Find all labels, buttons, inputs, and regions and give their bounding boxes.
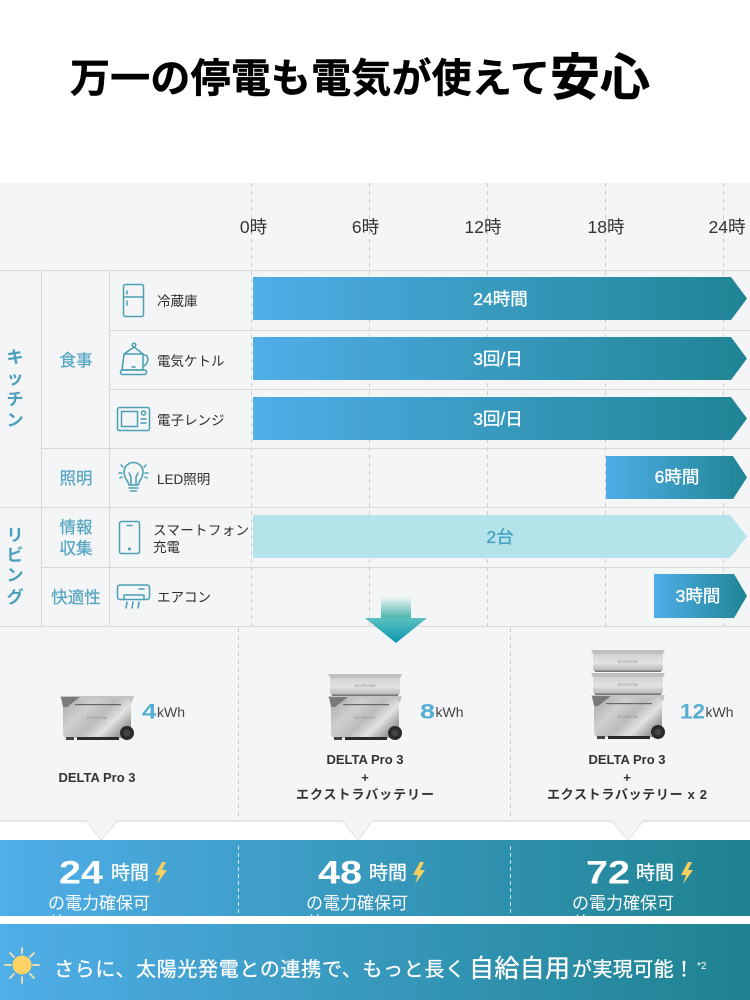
time axis labels: 6時 — [352, 217, 379, 237]
bar: smartphone 2 units — [253, 515, 747, 558]
side heading: kitchen: ン — [6, 411, 24, 430]
result: 48 hours: 48 — [318, 854, 362, 890]
result: 48 hours: 約 — [308, 914, 325, 933]
side heading: living — [6, 526, 24, 607]
result: 48 hours: の電力確保可 — [306, 894, 408, 913]
product: DELTA Pro 3 plus one extra battery: 8 — [420, 700, 435, 724]
icon: smartphone — [120, 522, 140, 554]
product: DELTA Pro 3 plus two extra batteries — [547, 650, 734, 802]
title — [70, 50, 650, 106]
side heading: living: ビ — [6, 545, 24, 565]
arrow: down — [365, 597, 427, 643]
product: DELTA Pro 3 plus two extra batteries: ECOFLOW — [618, 714, 638, 719]
product: DELTA Pro 3: 4 — [142, 700, 157, 724]
product: DELTA Pro 3: DELTA Pro 3 — [58, 770, 136, 785]
result: 48 hours — [306, 854, 425, 933]
result: 24 hours — [48, 854, 167, 933]
side heading: kitchen: キ — [6, 348, 24, 367]
side heading: living: リ — [6, 526, 24, 545]
product: DELTA Pro 3 plus two extra batteries: kWh — [706, 704, 734, 720]
icon: electric kettle — [120, 343, 148, 374]
bar: refrigerator 24 hours: 24時間 — [473, 289, 528, 309]
time axis labels: 18時 — [588, 217, 624, 237]
banner: solar self-consumption: さらに、太陽光発電との連携で、もっと長く — [54, 958, 465, 981]
panel: backup duration — [0, 840, 750, 933]
bar: LED 6 hours: 6時間 — [655, 467, 699, 487]
side heading: living: ン — [6, 566, 24, 585]
result: 24 hours: 約 — [50, 914, 67, 933]
time axis labels — [240, 217, 745, 237]
label: refrigerator: 冷蔵庫 — [157, 294, 198, 309]
result: 48 hours: 時間 — [369, 862, 407, 884]
icon: sun — [5, 948, 39, 983]
category labels: 情報 — [60, 518, 93, 537]
result: 72 hours: 時間 — [636, 862, 674, 884]
label: LED light: LED照明 — [157, 472, 210, 487]
product: DELTA Pro 3 plus one extra battery: ECOFLOW — [355, 683, 375, 688]
icon: air conditioner — [118, 585, 150, 608]
chart grid — [0, 183, 750, 626]
time axis labels: 12時 — [465, 217, 501, 237]
product: DELTA Pro 3: kWh — [157, 704, 185, 720]
icon: LED bulb — [119, 462, 148, 491]
banner: solar self-consumption: が実現可能！ — [572, 958, 694, 981]
bar: kettle 3 times per day: 3回/日 — [473, 349, 523, 369]
panel: usage chart and products background — [0, 183, 750, 821]
product: DELTA Pro 3 plus one extra battery: + — [361, 770, 369, 785]
callout notches — [0, 820, 750, 840]
result: 24 hours: の電力確保可 — [48, 894, 150, 913]
label: microwave: 電子レンジ — [157, 413, 224, 428]
product: DELTA Pro 3: ECOFLOW — [87, 715, 107, 720]
bar: air conditioner 3 hours — [654, 574, 747, 618]
product: DELTA Pro 3 plus two extra batteries: + — [623, 770, 631, 785]
bar: LED 6 hours — [606, 456, 747, 499]
bar: air conditioner 3 hours: 3時間 — [676, 586, 720, 606]
product: DELTA Pro 3 plus one extra battery: エクストラバッテリー — [296, 787, 434, 802]
time axis labels: 24時 — [709, 217, 745, 237]
label: air conditioner: エアコン — [157, 590, 211, 605]
banner: solar self-consumption — [0, 924, 750, 1000]
result: 72 hours: 72 — [586, 854, 630, 890]
product: DELTA Pro 3 plus two extra batteries: ECOFLOW — [618, 682, 638, 687]
product: DELTA Pro 3 plus two extra batteries: エクストラバッテリー x 2 — [547, 787, 707, 802]
category labels: 快適性 — [51, 588, 101, 607]
product: DELTA Pro 3 plus one extra battery: ECOFLOW — [355, 715, 375, 720]
bar: kettle 3 times per day — [253, 337, 747, 380]
icon: microwave — [118, 408, 150, 430]
label: smartphone charging — [153, 523, 249, 555]
result: 72 hours — [572, 854, 693, 933]
bar: microwave 3 times per day — [253, 397, 747, 440]
result: 24 hours: 時間 — [111, 862, 149, 884]
side heading: kitchen: チ — [6, 390, 24, 409]
product: DELTA Pro 3 plus one extra battery: DELTA Pro 3 — [326, 752, 404, 767]
label: electric kettle: 電気ケトル — [157, 354, 224, 369]
bar: smartphone 2 units: 2台 — [486, 527, 514, 547]
banner: solar self-consumption: *2 — [697, 961, 707, 972]
product: DELTA Pro 3 plus two extra batteries: DELTA Pro 3 — [588, 752, 666, 767]
result: 72 hours: の電力確保可 — [572, 894, 674, 913]
product: DELTA Pro 3 plus one extra battery: kWh — [436, 704, 464, 720]
label: smartphone charging: 充電 — [153, 540, 180, 555]
side heading: kitchen — [6, 348, 24, 430]
result: 72 hours: 約 — [574, 914, 591, 933]
category labels — [51, 351, 101, 607]
title: 安心 — [550, 50, 650, 106]
product: DELTA Pro 3 plus two extra batteries: ECOFLOW — [618, 659, 638, 664]
category labels: 収集 — [60, 539, 92, 558]
bar: microwave 3 times per day: 3回/日 — [473, 409, 523, 429]
category labels: 食事 — [60, 351, 92, 370]
product: DELTA Pro 3 — [58, 696, 185, 785]
side heading: kitchen: ッ — [6, 369, 24, 388]
side heading: living: グ — [6, 587, 24, 607]
time axis labels: 0時 — [240, 217, 267, 237]
title: 万一の停電も電気が使えて — [70, 57, 550, 101]
banner: solar self-consumption: 自給自用 — [469, 955, 570, 983]
product: DELTA Pro 3 plus two extra batteries: 12 — [680, 700, 705, 724]
icon: refrigerator — [124, 284, 144, 316]
product: DELTA Pro 3 plus one extra battery — [296, 674, 464, 802]
product dividers — [238, 628, 510, 821]
category labels: 照明 — [60, 470, 92, 488]
result: 24 hours: 24 — [59, 854, 103, 890]
label: smartphone charging: スマートフォン — [153, 523, 249, 538]
bar: refrigerator 24 hours — [253, 277, 747, 320]
